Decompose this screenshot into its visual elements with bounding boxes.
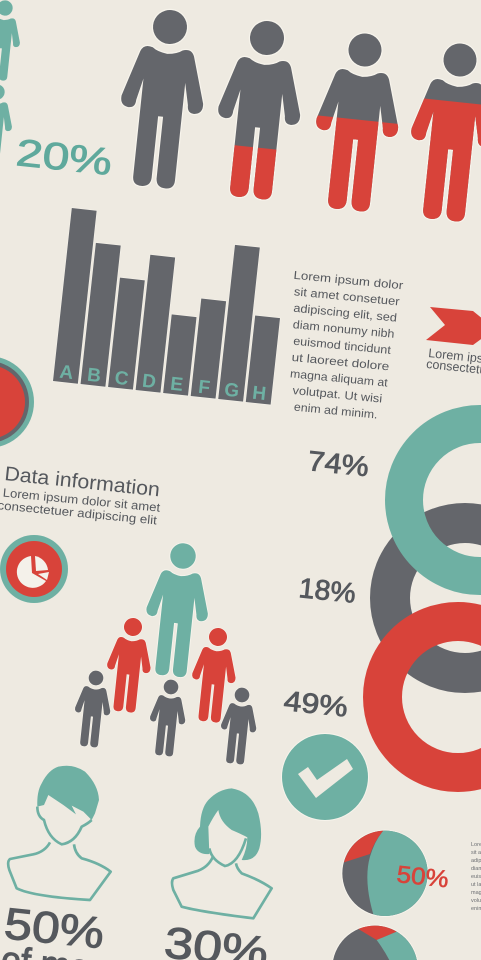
bar chart: B: [86, 365, 102, 387]
icon: red ribbon arrow: [426, 307, 481, 345]
chart: pie with 50%: [342, 831, 428, 916]
text block: lorem paragraph: adipiscing elit, sed: [293, 303, 397, 325]
icon: second teal person cropped left: [0, 82, 16, 166]
label: pie 50%: 50%: [395, 861, 450, 893]
bar chart: A: [58, 362, 75, 384]
stat: 50% of men: 50%: [2, 899, 107, 958]
icon: concentric circle cropped left: [0, 356, 34, 448]
text block: arrow caption: [426, 346, 481, 378]
bar chart: [53, 208, 289, 406]
bar chart: F: [197, 377, 211, 399]
icon: grey person centre: [146, 678, 189, 758]
bar chart: H: [251, 383, 267, 405]
text block: lorem paragraph: magna aliquam at: [290, 368, 389, 390]
chart: teal ring: [404, 424, 481, 576]
text block: lorem paragraph: volutpat. Ut wisi: [292, 385, 383, 406]
icon: grey person left: [71, 669, 114, 749]
icon: person filled red to the knees: [217, 20, 301, 200]
icon: male head outline: [8, 766, 111, 900]
icon: female head outline: [172, 788, 272, 918]
text block: lorem paragraph: ut laoreet dolore: [291, 352, 390, 373]
text block: tiny text at right edge: [471, 842, 481, 912]
icon: teal leader person: [140, 540, 215, 679]
stat: 20%: 20%: [14, 132, 114, 184]
person pyramid: [71, 540, 260, 766]
icon: person filled red to the chest: [410, 42, 481, 222]
text block: lorem paragraph: [280, 270, 404, 423]
icon: check mark badge: [282, 734, 368, 820]
text block: data information caption: [0, 485, 161, 528]
icon: grey person right: [217, 686, 260, 766]
bar chart: C: [114, 368, 130, 390]
chart: lower pie cropped: [332, 926, 418, 960]
heading: data information: Data information: [3, 463, 161, 501]
text block: lorem paragraph: diam nonumy nibh: [292, 319, 395, 341]
text block: data information caption: Lorem ipsum dolor sit amet: [2, 486, 161, 515]
icon: red person left: [102, 616, 156, 714]
icon: grey person, no fill level: [112, 6, 213, 191]
text block: lorem paragraph: Lorem ipsum dolor: [293, 270, 404, 292]
icon: red person right: [187, 626, 241, 724]
icon: person filled red to the waist: [315, 32, 399, 212]
stat: 49%: 49%: [282, 685, 349, 723]
chart: red ring: [382, 622, 481, 772]
icon: pie chart badge: [0, 535, 68, 603]
chart: grey ring: [390, 523, 481, 673]
text block: lorem paragraph: euismod tincidunt: [293, 336, 392, 357]
stat: 18%: 18%: [297, 572, 357, 609]
bar chart: G: [223, 380, 240, 402]
bar chart: D: [141, 371, 157, 393]
bar chart: E: [169, 374, 184, 396]
stat: 74%: 74%: [306, 445, 370, 482]
text block: data information caption: consectetuer adipiscing elit: [0, 498, 158, 527]
icon: teal person cropped top left: [0, 0, 24, 82]
text block: lorem paragraph: sit amet consetuer: [293, 286, 400, 308]
text block: lorem paragraph: enim ad minim.: [293, 402, 378, 422]
